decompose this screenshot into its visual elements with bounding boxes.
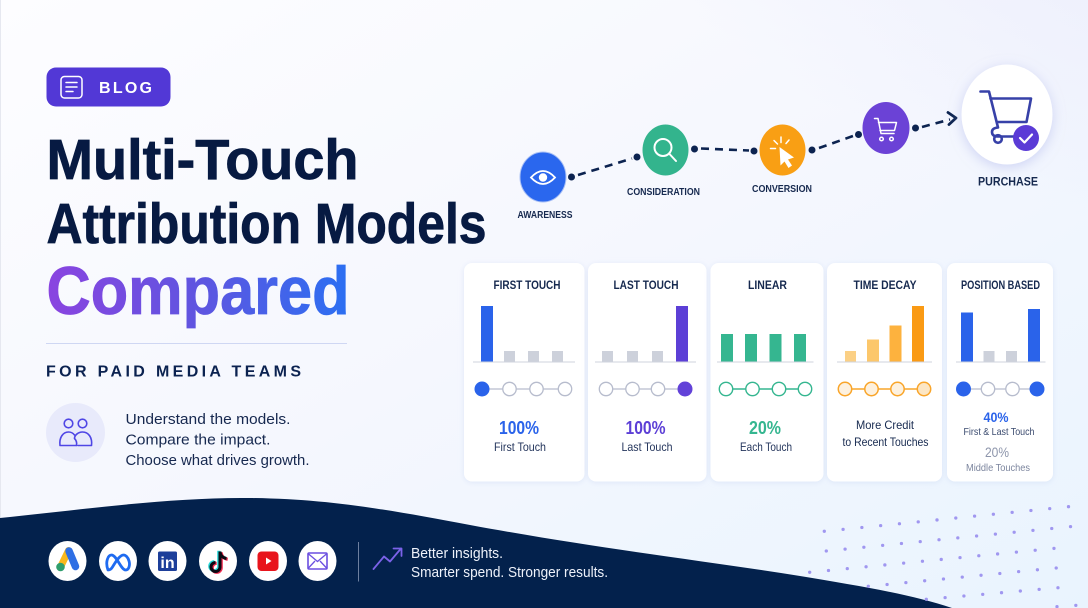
- panel: first touch: [464, 263, 584, 482]
- icon: tiktok: [199, 541, 237, 581]
- channel icons: [48, 541, 336, 581]
- icon: growth arrow: [374, 548, 402, 569]
- panel: last touch: LAST TOUCH: [614, 278, 678, 292]
- panel: last touch: [588, 263, 706, 482]
- panel: position based: 40%: [984, 409, 1009, 425]
- panel: linear: [710, 263, 824, 482]
- description text: Compare the impact.: [126, 432, 270, 448]
- touchpoints: position based: [956, 382, 1044, 396]
- touchpoints: time decay: [838, 382, 931, 396]
- icon: youtube: [249, 541, 287, 581]
- panel: last touch: Last Touch: [622, 440, 672, 454]
- badge label: BLOG: [99, 80, 152, 97]
- description text: [126, 411, 310, 469]
- footer tagline: [411, 545, 608, 581]
- panel: linear: 20%: [749, 418, 781, 438]
- blog badge: [46, 68, 170, 106]
- panel: linear: LINEAR: [748, 278, 787, 292]
- journey step: awareness: [518, 152, 573, 221]
- journey path arrow: [568, 112, 956, 180]
- journey step: consideration: CONSIDERATION: [627, 187, 700, 198]
- panel: first touch: First Touch: [494, 440, 546, 454]
- title: [46, 128, 486, 329]
- icon: people: [46, 403, 105, 462]
- panel: position based: POSITION BASED: [961, 278, 1040, 292]
- panel: position based: 20%: [985, 444, 1009, 460]
- icon: document: [61, 76, 82, 98]
- title: Multi-Touch: [46, 128, 358, 192]
- panel: time decay: More Credit: [856, 418, 915, 432]
- bar chart: first touch: [473, 306, 575, 362]
- panel: time decay: to Recent Touches: [842, 435, 928, 449]
- subtitle: FOR PAID MEDIA TEAMS: [46, 364, 301, 380]
- touchpoints: linear: [719, 382, 812, 396]
- panel: last touch: 100%: [626, 418, 666, 438]
- journey step: consideration: [627, 124, 700, 198]
- panel: time decay: TIME DECAY: [854, 278, 916, 292]
- journey step: conversion: [752, 124, 812, 195]
- panel: position based: First & Last Touch: [964, 426, 1035, 438]
- footer tagline: Better insights.: [411, 545, 503, 562]
- bar chart: time decay: [837, 306, 932, 362]
- icon: linkedin: in: [160, 555, 175, 572]
- panel: linear: Each Touch: [740, 440, 792, 454]
- footer tagline: Smarter spend. Stronger results.: [411, 564, 608, 581]
- title: Attribution Models: [46, 192, 486, 256]
- bar chart: position based: [956, 309, 1046, 362]
- panel: position based: [947, 263, 1053, 482]
- journey step: purchase: [962, 64, 1052, 188]
- journey step: awareness: AWARENESS: [518, 210, 573, 221]
- description text: Understand the models.: [126, 411, 290, 428]
- touchpoints: first touch: [474, 382, 572, 396]
- panel: time decay: [827, 263, 942, 482]
- bar chart: last touch: [595, 306, 696, 362]
- icon: meta: [99, 541, 137, 581]
- panel: first touch: 100%: [499, 418, 539, 438]
- touchpoints: last touch: [599, 382, 692, 396]
- icon: linkedin: [148, 541, 186, 581]
- navy wave footer: [0, 498, 952, 608]
- dot pattern: [810, 507, 1076, 607]
- panel: first touch: FIRST TOUCH: [494, 278, 560, 292]
- icon: email: [298, 541, 336, 581]
- icon: google ads: [48, 541, 86, 581]
- journey step: purchase: PURCHASE: [978, 174, 1038, 188]
- description text: Choose what drives growth.: [126, 452, 310, 469]
- panel: position based: Middle Touches: [966, 462, 1030, 474]
- journey step: conversion: CONVERSION: [752, 184, 812, 195]
- bar chart: linear: [717, 334, 814, 362]
- title: Compared: [46, 253, 350, 329]
- journey step: cart: [862, 102, 910, 154]
